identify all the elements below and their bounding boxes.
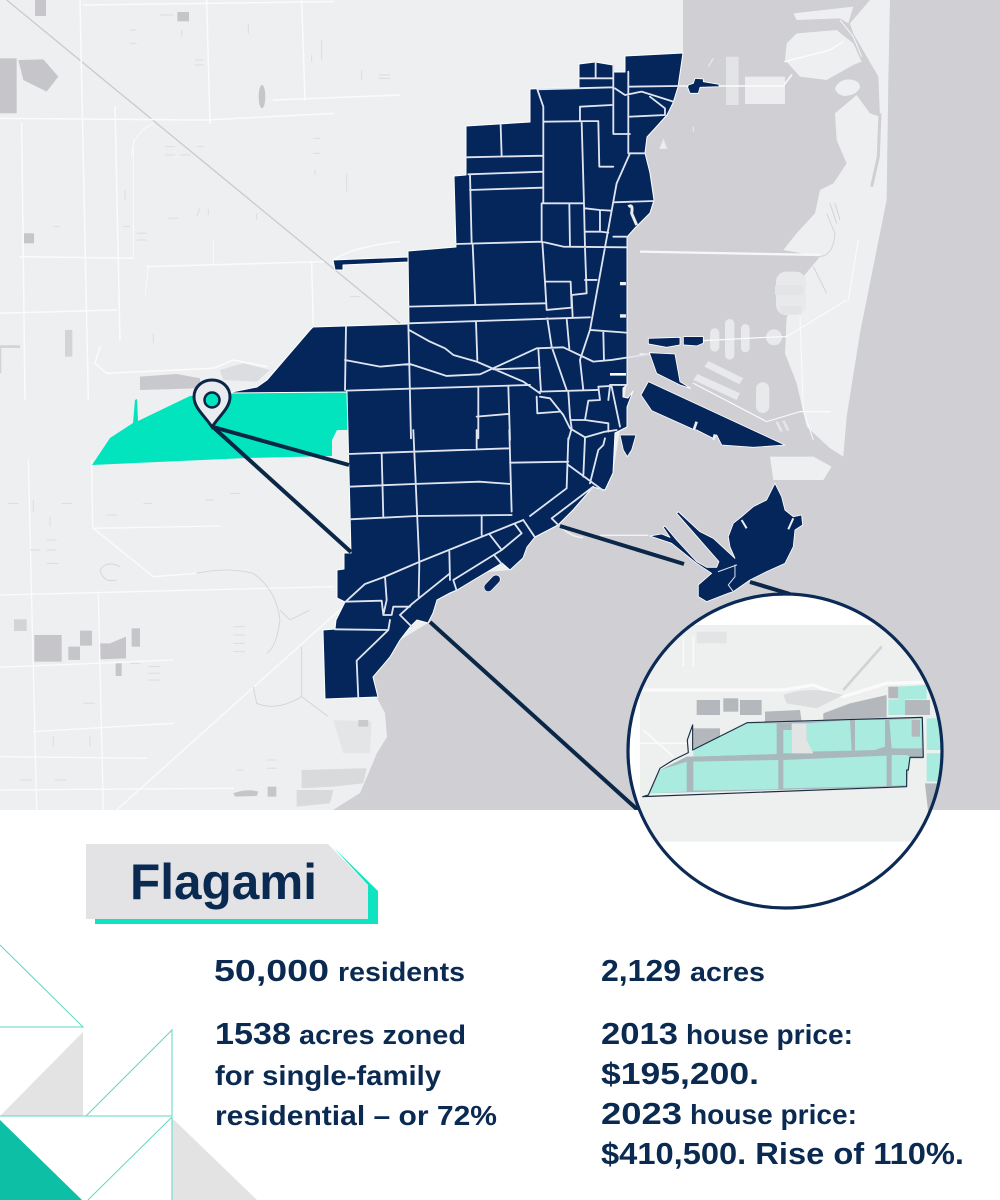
- stat: acres: 2,129: [601, 953, 681, 988]
- stat: residents: 50,000: [214, 953, 329, 988]
- title: Flagami tag: Flagami: [130, 854, 317, 910]
- stat: house prices: [601, 1016, 964, 1171]
- neighbourhood boundaries, downtown: [540, 386, 620, 440]
- decoration: geometric triangles: [0, 945, 257, 1200]
- City of Miami neighbourhoods (navy): [227, 53, 683, 699]
- mainland: [0, 0, 683, 810]
- leader lines: [213, 427, 790, 812]
- stat: single-family zoning: residential – or 72%: [215, 1100, 497, 1131]
- roads and grey land features, west: [0, 0, 400, 400]
- stat: single-family zoning: [215, 1016, 497, 1131]
- icon: location pin: [194, 380, 230, 427]
- stat: house prices: $195,200.: [601, 1056, 759, 1091]
- inset circle: zoning detail map: [628, 594, 942, 908]
- navy islands, causeway: [688, 78, 719, 93]
- neighbourhood boundaries, north: [345, 62, 678, 440]
- grey blocks: [693, 687, 940, 813]
- Flagami neighbourhood shape (teal): [92, 392, 350, 465]
- stat: house prices: $410,500. Rise of 110%.: [601, 1136, 964, 1171]
- stat: single-family zoning: 1538: [215, 1016, 291, 1051]
- stat: single-family zoning: acres zoned: [299, 1020, 466, 1050]
- map: Miami base map: [0, 0, 1000, 812]
- stat: house prices: house price:: [690, 1099, 857, 1130]
- Flagami outline: [643, 717, 923, 797]
- stat: acres: acres: [690, 957, 765, 987]
- stat: single-family zoning: for single-family: [215, 1060, 441, 1091]
- stat: house prices: house price:: [686, 1019, 853, 1050]
- stat: house prices: 2013: [601, 1016, 678, 1051]
- upper roads: [640, 682, 940, 697]
- stat: residents: residents: [338, 957, 465, 987]
- neighbourhood boundaries, south: [335, 430, 605, 698]
- stat: house prices: 2023: [601, 1096, 682, 1131]
- teal zoning blocks: [650, 749, 923, 793]
- title: Flagami tag: [86, 844, 378, 924]
- Miami Beach barrier island and bay islands: [640, 0, 890, 480]
- Port and Virginia Key islands (navy): [620, 353, 785, 457]
- stat: residents: [214, 953, 465, 988]
- thin western strip: [333, 257, 408, 270]
- stat: acres: [601, 953, 765, 988]
- Dodge Island and Key Biscayne shape (navy): [488, 483, 803, 602]
